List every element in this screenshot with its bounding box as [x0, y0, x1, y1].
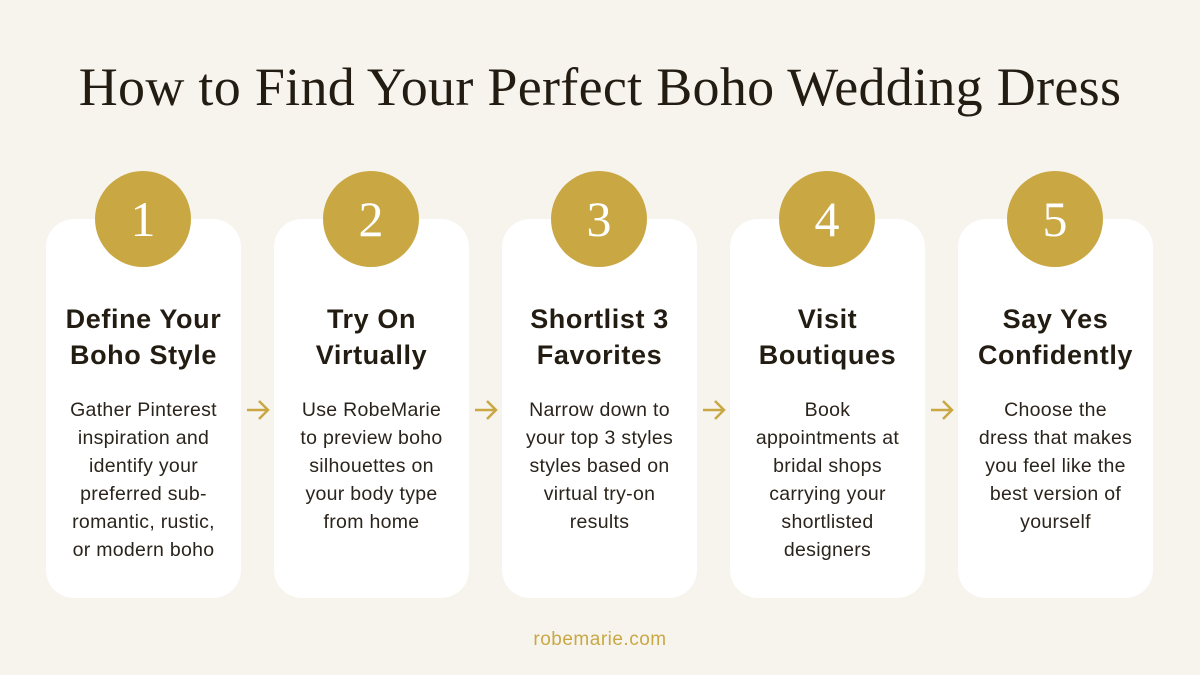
card 2: silhouettes on	[309, 455, 434, 477]
circle 1	[95, 171, 191, 267]
card 3	[502, 219, 697, 598]
card 2: to preview boho	[300, 427, 443, 449]
card 4: shortlisted	[781, 511, 874, 533]
card 4: bridal shops	[773, 455, 882, 477]
card 3: virtual try-on	[544, 483, 655, 505]
circle 3: 3	[586, 191, 612, 247]
card 3: your top 3 styles	[526, 427, 673, 449]
circle 2	[323, 171, 419, 267]
card 3: Narrow down to	[529, 399, 670, 421]
card 4: appointments at	[756, 427, 899, 449]
card 1: Define Your	[66, 304, 221, 334]
card 5: best version of	[990, 483, 1121, 505]
card 2: Virtually	[316, 340, 427, 370]
card 3: Shortlist 3	[530, 304, 669, 334]
card 5: dress that makes	[979, 427, 1132, 449]
card 2: from home	[324, 511, 419, 533]
card 5: Say Yes	[1003, 304, 1108, 334]
card 1: identify your	[89, 455, 198, 477]
card 1: preferred sub-	[80, 483, 207, 505]
card 1: inspiration and	[78, 427, 209, 449]
title: How to Find Your Perfect Boho Wedding Dress	[79, 57, 1121, 117]
card 5: Choose the	[1004, 399, 1107, 421]
arrow 4	[931, 400, 954, 420]
card 2: Try On	[327, 304, 416, 334]
arrow 2	[475, 400, 498, 420]
card 1: Boho Style	[70, 340, 217, 370]
card 1: Gather Pinterest	[70, 399, 217, 421]
card 2: your body type	[305, 483, 438, 505]
card 5: yourself	[1020, 511, 1091, 533]
arrow 3	[703, 400, 726, 420]
card 2	[274, 219, 469, 598]
card 4: Boutiques	[759, 340, 896, 370]
circle 2: 2	[358, 191, 384, 247]
card 5	[958, 219, 1153, 598]
card 3: results	[570, 511, 629, 533]
card 3: Favorites	[537, 340, 662, 370]
card 1	[46, 219, 241, 598]
arrow 1	[247, 400, 270, 420]
circle 5	[1007, 171, 1103, 267]
circle 1: 1	[130, 191, 156, 247]
circle 5: 5	[1042, 191, 1068, 247]
card 4: carrying your	[769, 483, 886, 505]
circle 4	[779, 171, 875, 267]
card 1: or modern boho	[73, 539, 214, 561]
card 3: styles based on	[529, 455, 670, 477]
card 4: Visit	[798, 304, 857, 334]
card 4: Book	[805, 399, 850, 421]
card 2: Use RobeMarie	[302, 399, 441, 421]
circle 4: 4	[814, 191, 840, 247]
card 4: designers	[784, 539, 871, 561]
card 5: you feel like the	[985, 455, 1126, 477]
card 1: romantic, rustic,	[72, 511, 215, 533]
circle 3	[551, 171, 647, 267]
card 5: Confidently	[978, 340, 1133, 370]
footer: robemarie.com	[533, 629, 667, 650]
card 4	[730, 219, 925, 598]
